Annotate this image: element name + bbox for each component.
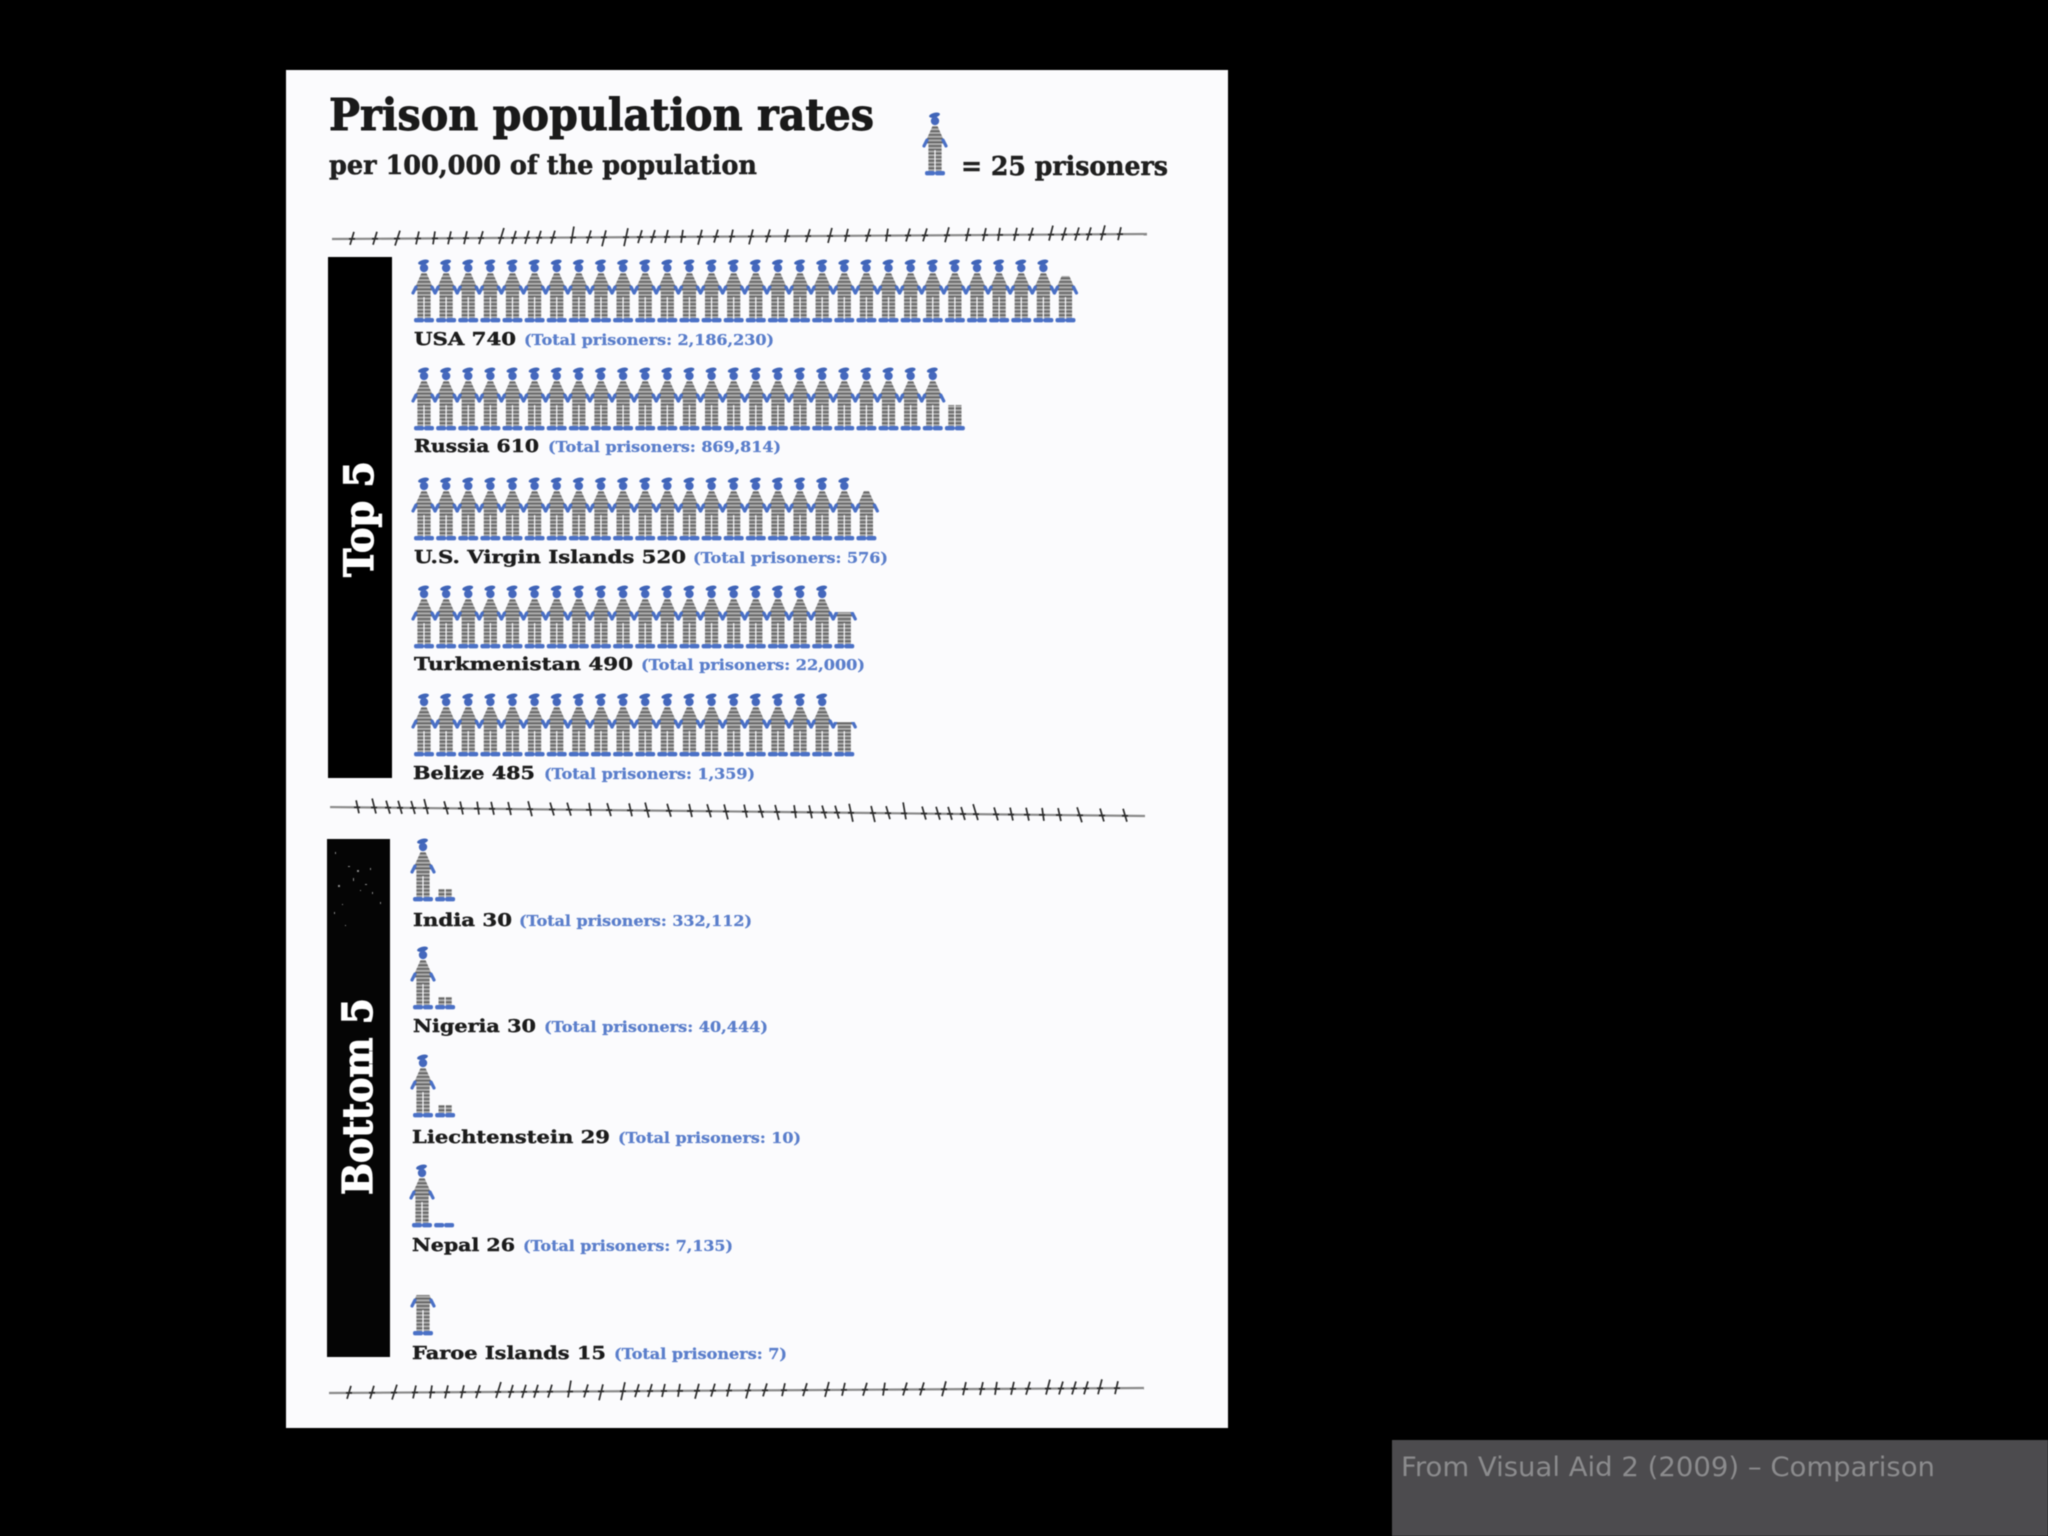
pictogram: Nepal 1.04 figures [411, 1164, 455, 1227]
U.S. Virgin Islands total prisoners: (Total prisoners: 576) [693, 550, 888, 567]
Nepal total prisoners: (Total prisoners: 7,135) [523, 1238, 733, 1255]
barbed wire divider bottom [329, 1377, 1144, 1402]
pictogram: Turkmenistan 19.6 figures [413, 585, 855, 648]
caption text: From Visual Aid 2 (2009) – Comparison [1401, 1452, 1935, 1483]
Belize total prisoners: (Total prisoners: 1,359) [544, 766, 755, 783]
title: Prison population rates [329, 90, 874, 141]
USA total prisoners: (Total prisoners: 2,186,230) [524, 332, 774, 349]
pictogram: Nigeria 1.2 figures [412, 946, 456, 1009]
Nepal label: Nepal 26 [412, 1235, 515, 1256]
paper page [286, 70, 1228, 1428]
row: Faroe Islands [410, 1294, 786, 1363]
row: Liechtenstein [412, 1054, 801, 1148]
Nigeria label: Nigeria 30 [413, 1016, 536, 1037]
Nigeria total prisoners: (Total prisoners: 40,444) [544, 1019, 768, 1036]
pictogram: Faroe Islands 0.6 figure [410, 1294, 436, 1336]
subtitle: per 100,000 of the population [329, 151, 757, 181]
legend: one figure equals 25 prisoners [924, 112, 1168, 182]
India total prisoners: (Total prisoners: 332,112) [519, 913, 752, 930]
pictogram: U.S. Virgin Islands 20.8 figures [413, 477, 877, 540]
pictogram: Russia 24.4 figures [413, 367, 966, 430]
Belize label: Belize 485 [413, 763, 535, 784]
Liechtenstein total prisoners: (Total prisoners: 10) [618, 1130, 801, 1147]
panel: Top 5 side bar [328, 257, 392, 778]
row: India [412, 838, 752, 931]
row: U.S. Virgin Islands [413, 477, 888, 568]
Faroe Islands total prisoners: (Total prisoners: 7) [614, 1346, 787, 1363]
pictogram: India 1.2 figures [412, 838, 456, 901]
legend text: = 25 prisoners [961, 152, 1168, 182]
row: Nigeria [412, 946, 768, 1037]
row: Belize [413, 693, 855, 784]
pictogram: Liechtenstein 1.16 figures [412, 1054, 456, 1117]
Top 5 label: Top 5 [336, 461, 383, 577]
caption bar [1392, 1440, 2048, 1536]
Faroe Islands label: Faroe Islands 15 [412, 1343, 606, 1364]
row: Turkmenistan [413, 585, 865, 675]
pictogram: Belize 19.4 figures [413, 693, 855, 756]
row: USA [413, 259, 1076, 350]
row: Russia [413, 367, 966, 457]
icon: prisoner figure [924, 112, 946, 175]
row: Nepal [411, 1164, 733, 1256]
Liechtenstein label: Liechtenstein 29 [412, 1127, 610, 1148]
barbed wire divider top [332, 223, 1147, 248]
Russia label: Russia 610 [414, 436, 539, 457]
India label: India 30 [413, 910, 512, 931]
Turkmenistan total prisoners: (Total prisoners: 22,000) [641, 657, 865, 674]
Russia total prisoners: (Total prisoners: 869,814) [548, 439, 781, 456]
panel: Bottom 5 side bar [327, 839, 390, 1357]
Bottom 5 label: Bottom 5 [334, 998, 382, 1195]
pictogram: USA 29.6 figures [413, 259, 1076, 322]
Turkmenistan label: Turkmenistan 490 [414, 654, 633, 675]
U.S. Virgin Islands label: U.S. Virgin Islands 520 [414, 547, 686, 568]
film speckle on bar [334, 852, 381, 926]
barbed wire divider middle [330, 796, 1145, 825]
USA label: USA 740 [414, 329, 516, 350]
